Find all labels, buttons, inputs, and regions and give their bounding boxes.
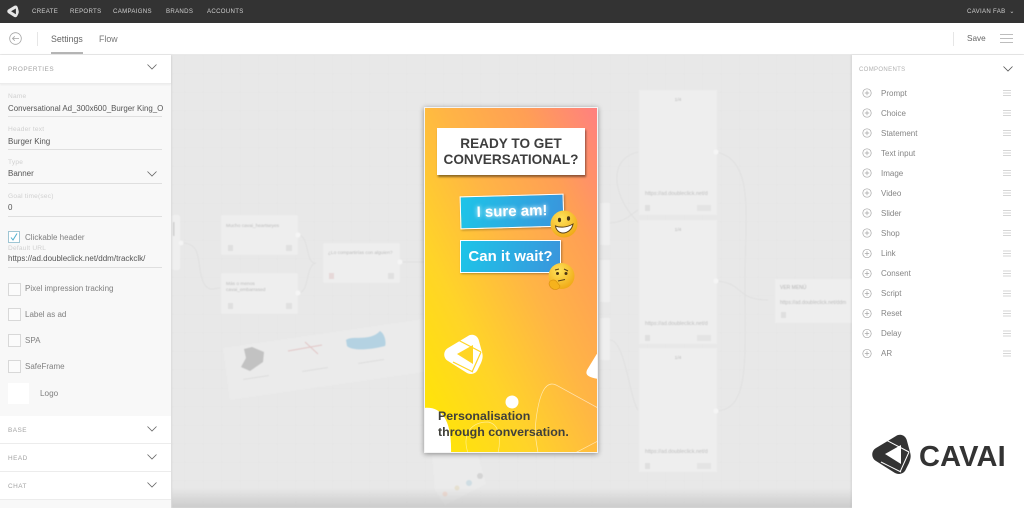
choice button: Can it wait: Can it wait? — [468, 248, 553, 265]
component: Script: Script — [881, 289, 901, 298]
tab: Flow: Flow — [99, 34, 118, 44]
field: default URL: Default URL — [8, 245, 46, 252]
checkbox: clickable header — [8, 231, 85, 243]
wordmark: CAVAI — [919, 441, 1006, 473]
section: chat: CHAT — [8, 483, 27, 490]
field: goal time — [8, 193, 162, 217]
field: name — [8, 93, 163, 117]
components list icons — [862, 88, 1011, 358]
flow node: card 2 of 5 — [639, 220, 718, 344]
section: head: HEAD — [8, 455, 28, 462]
top navigation bar — [0, 0, 1024, 23]
flow node: ver menu: VER MENÚ — [780, 284, 807, 291]
properties header — [0, 55, 171, 84]
component: Delay: Delay — [881, 329, 901, 338]
checkbox: pixel impression tracking — [8, 283, 113, 296]
checkbox: label as ad: Label as ad — [25, 310, 66, 319]
panel: conversational ad — [424, 107, 598, 453]
nav item: CAMPAIGNS — [113, 8, 152, 15]
flow node: Mas o menos — [221, 273, 300, 314]
logo upload: Logo — [40, 389, 58, 398]
component: Shop: Shop — [881, 229, 900, 238]
checkbox: label as ad — [8, 308, 66, 321]
nav item: CREATE — [32, 8, 58, 15]
component: Text input: Text input — [881, 149, 915, 158]
flow node: card 3 of 5 — [639, 348, 718, 472]
flow node: ver menu: https://ad.doubleclick.net/ddm — [780, 300, 846, 306]
flow node: question: ¿Lo compartirías con alguien? — [328, 250, 393, 256]
tagline: Personalisation — [438, 409, 530, 423]
icon: nav logo — [7, 6, 19, 18]
component: Link: Link — [881, 249, 896, 258]
nav item: ACCOUNTS — [207, 8, 244, 15]
section: head — [0, 444, 171, 472]
icon: back arrow — [9, 32, 22, 45]
flow node: right stubs — [600, 203, 610, 360]
heading box: READY TO GET — [460, 136, 562, 151]
icon: grinning emoji — [550, 210, 578, 238]
icon: brand mark — [872, 434, 911, 474]
toolbar — [0, 23, 1024, 55]
checkbox: SafeFrame: SafeFrame — [25, 362, 65, 371]
field: default URL — [8, 245, 162, 268]
field: goal time: 0 — [8, 203, 12, 212]
checkbox: SafeFrame — [8, 360, 65, 373]
flow node: product carousel — [223, 319, 424, 400]
canvas background with flow diagram — [172, 97, 852, 508]
field: default URL: https://ad.doubleclick.net/ddm/trackclk/ — [8, 254, 145, 263]
component: Slider: Slider — [881, 209, 901, 218]
field: type: Banner — [8, 169, 34, 178]
flow node: Mas o menos: cavai_embarrased — [226, 287, 266, 293]
flow node: card 2 of 5: https://ad.doubleclick.net/d — [645, 321, 708, 327]
field: header text: Burger King — [8, 137, 50, 146]
flow node: card 1 of 5: 1/4 — [675, 97, 682, 103]
brand logo: CAVAI — [872, 434, 1006, 474]
heading box — [437, 128, 585, 175]
small tilted sheet under ad — [432, 455, 486, 505]
panel: properties — [0, 55, 171, 508]
icon: white brand logo — [444, 334, 483, 374]
tagline — [438, 409, 569, 439]
component: Prompt: Prompt — [881, 89, 907, 98]
component: Consent: Consent — [881, 269, 911, 278]
ad decoration — [425, 354, 597, 452]
components header — [859, 66, 1013, 73]
save button: Save — [967, 34, 986, 43]
account menu: CAVIAN FAB ⌄ — [967, 8, 1015, 15]
choice button: Can it wait — [460, 240, 561, 273]
tagline: through conversation. — [438, 425, 569, 439]
icon: hamburger menu — [1000, 34, 1013, 43]
flow node: card 2 of 5: 1/4 — [675, 227, 682, 233]
component: Choice: Choice — [881, 109, 906, 118]
checkbox: SPA: SPA — [25, 336, 40, 345]
field: name: Name — [8, 93, 26, 100]
section: base: BASE — [8, 427, 27, 434]
flow node: card 3 of 5: https://ad.doubleclick.net/d — [645, 449, 708, 455]
flow connectors — [182, 152, 768, 411]
field: goal time: Goal time(sec) — [8, 193, 54, 200]
flow node: Mas o menos: Más o menos — [226, 281, 255, 287]
checkbox: pixel impression tracking: Pixel impression tracking — [25, 284, 113, 293]
field: name: Conversational Ad_300x600_Burger King_Oc — [8, 104, 163, 113]
choice button: I sure am: I sure am! — [476, 202, 548, 221]
panel: components — [852, 55, 1024, 508]
nav item: REPORTS — [70, 8, 101, 15]
field: header text — [8, 126, 162, 150]
flow node: ver menu — [775, 279, 852, 323]
flow node: Mucho cavai — [221, 215, 300, 255]
flow node: Mucho cavai: Mucho cavai_heartseyes — [226, 223, 280, 229]
heading box: CONVERSATIONAL? — [444, 152, 578, 167]
flow node: card 1 of 5 — [639, 90, 718, 215]
component: Video: Video — [881, 189, 901, 198]
section: chat — [0, 472, 171, 500]
properties header: PROPERTIES — [8, 66, 54, 73]
component: AR: AR — [881, 349, 892, 358]
flow node: left stub — [172, 215, 184, 270]
nav item: BRANDS — [166, 8, 193, 15]
field: header text: Header text — [8, 126, 44, 133]
choice button: I sure am — [460, 194, 564, 229]
checkbox: SPA — [8, 334, 40, 347]
components header: COMPONENTS — [859, 67, 906, 73]
checkbox: clickable header: Clickable header — [25, 233, 85, 242]
component: Reset: Reset — [881, 309, 902, 318]
component: Statement: Statement — [881, 129, 917, 138]
flow node: card 3 of 5: 1/4 — [675, 355, 682, 361]
icon: thinking emoji — [548, 263, 574, 290]
tab: Settings: Settings — [51, 34, 83, 44]
flow node: question — [323, 243, 402, 283]
field: type — [8, 159, 162, 184]
component: Image: Image — [881, 169, 903, 178]
flow node: card 1 of 5: https://ad.doubleclick.net/d — [645, 191, 708, 197]
field: type: Type — [8, 159, 23, 166]
section: base — [0, 416, 171, 444]
